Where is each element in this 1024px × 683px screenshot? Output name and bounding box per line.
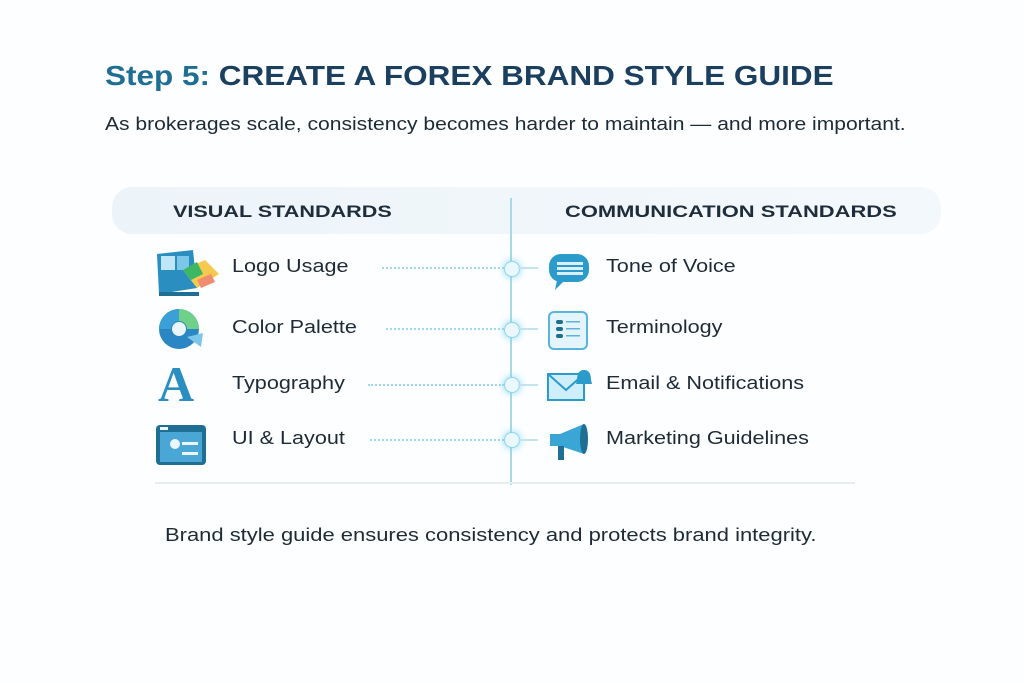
text: marketing guidelines: Marketing Guidelines — [606, 428, 809, 448]
heading: visual standards: VISUAL STANDARDS — [173, 202, 392, 221]
icon: UI & layout — [156, 425, 206, 465]
icon: terminology — [548, 311, 588, 350]
text: tone of voice: Tone of Voice — [606, 256, 736, 276]
icon: email — [547, 370, 592, 401]
connectors — [368, 256, 538, 453]
divider — [510, 198, 512, 485]
text: UI & layout: UI & Layout — [232, 428, 345, 448]
heading: communication standards: COMMUNICATION STANDARDS — [565, 202, 897, 221]
icon: tone of voice — [549, 254, 589, 290]
footer text: Brand style guide ensures consistency and protects brand integrity. — [165, 525, 816, 545]
icon: typography: A — [158, 356, 194, 412]
subtitle: As brokerages scale, consistency becomes harder to maintain — and more important. — [105, 114, 906, 134]
icon: color palette — [159, 309, 203, 349]
title: Step 5: CREATE A FOREX BRAND STYLE GUIDE — [105, 60, 834, 91]
text: typography: Typography — [232, 373, 345, 393]
text: terminology: Terminology — [606, 317, 722, 337]
icon: logo usage — [157, 250, 219, 296]
text: logo usage: Logo Usage — [232, 256, 348, 276]
text: email & notifications: Email & Notifications — [606, 373, 804, 393]
icon: megaphone — [550, 424, 588, 460]
header bar — [112, 187, 941, 234]
text: color palette: Color Palette — [232, 317, 357, 337]
